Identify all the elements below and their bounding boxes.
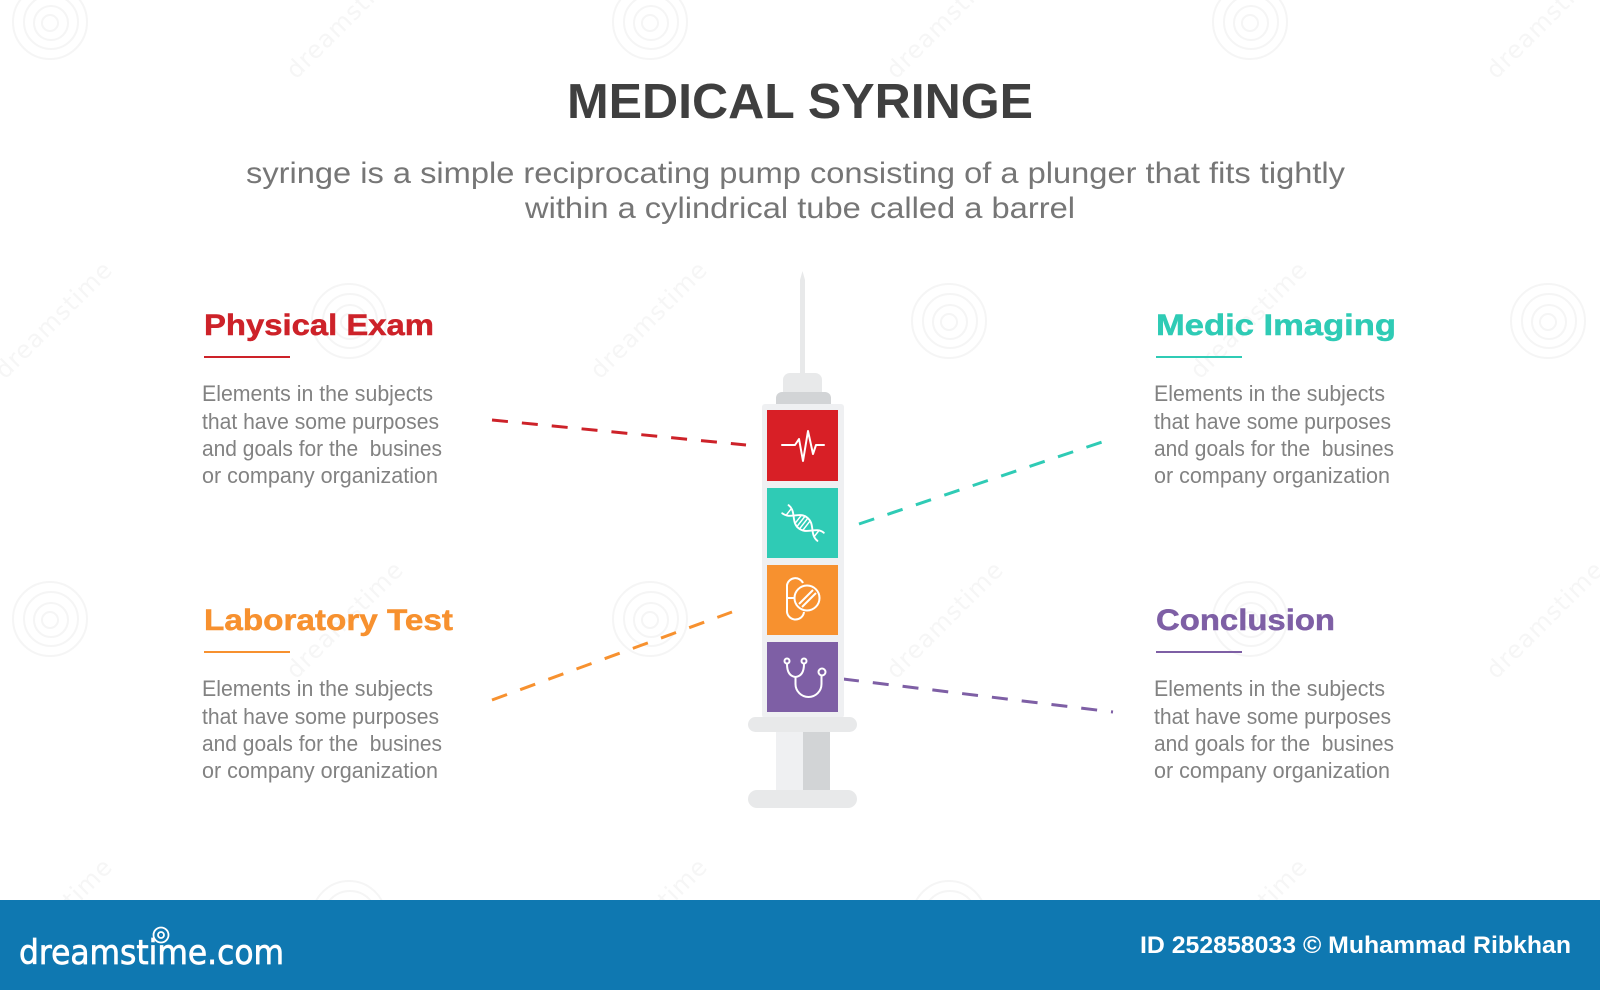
icon: stethoscope bbox=[784, 658, 826, 697]
panel: laboratory test: Elements in the subjects bbox=[202, 676, 433, 701]
watermark pattern: dreamstime bbox=[1184, 255, 1313, 384]
arrow: red dashed connector bbox=[492, 420, 746, 445]
panel: medic imaging: Elements in the subjects bbox=[1154, 381, 1385, 406]
panel: laboratory test: Laboratory Test bbox=[204, 604, 453, 637]
panel: physical exam bbox=[202, 309, 442, 488]
title: MEDICAL SYRINGE bbox=[567, 75, 1033, 129]
watermark pattern: dreamstime bbox=[880, 555, 1009, 684]
segment: teal bbox=[767, 488, 838, 558]
arrow: purple dashed connector bbox=[843, 679, 1113, 712]
panel: conclusion bbox=[1154, 604, 1394, 783]
hub bbox=[783, 373, 822, 392]
panel: conclusion: or company organization bbox=[1154, 758, 1390, 783]
icon: pills bbox=[787, 578, 820, 620]
watermark pattern: dreamstime bbox=[584, 852, 713, 981]
panel: physical exam: or company organization bbox=[202, 463, 438, 488]
footer credit: ID 252858033 © Muhammad Ribkhan bbox=[1140, 932, 1571, 959]
segment: red bbox=[767, 410, 838, 481]
panel: physical exam: and goals for the busines bbox=[202, 436, 442, 461]
panel: laboratory test: and goals for the busines bbox=[202, 731, 442, 756]
subtitle bbox=[246, 157, 1345, 225]
subtitle: within a cylindrical tube called a barrel bbox=[524, 192, 1075, 225]
lower flange bbox=[748, 790, 857, 808]
icon: dna bbox=[781, 504, 825, 542]
panel: medic imaging: that have some purposes bbox=[1154, 409, 1391, 434]
panel: conclusion: and goals for the busines bbox=[1154, 731, 1394, 756]
panel: laboratory test: or company organization bbox=[202, 758, 438, 783]
plunger rod bbox=[776, 732, 830, 791]
footer band bbox=[0, 900, 1600, 990]
syringe bbox=[748, 271, 857, 808]
watermark pattern: dreamstime bbox=[280, 555, 409, 684]
panel: conclusion: that have some purposes bbox=[1154, 704, 1391, 729]
panel: laboratory test bbox=[202, 604, 453, 783]
subtitle: syringe is a simple reciprocating pump consisting of a plunger that fits tightly bbox=[246, 157, 1345, 190]
segment: orange bbox=[767, 565, 838, 635]
panel: medic imaging: or company organization bbox=[1154, 463, 1390, 488]
hub collar bbox=[776, 392, 831, 404]
arrow: orange dashed connector bbox=[492, 612, 732, 700]
panel: physical exam: that have some purposes bbox=[202, 409, 439, 434]
panel: medic imaging: Medic Imaging bbox=[1156, 309, 1396, 342]
icon: heartbeat bbox=[782, 431, 824, 461]
arrow: teal dashed connector bbox=[859, 442, 1102, 524]
panel: physical exam: Physical Exam bbox=[204, 309, 434, 342]
icon: logo spiral bbox=[154, 928, 168, 942]
barrel bbox=[762, 404, 844, 718]
panel: conclusion: Conclusion bbox=[1156, 604, 1335, 637]
panel: conclusion: Elements in the subjects bbox=[1154, 676, 1385, 701]
panel: physical exam: Elements in the subjects bbox=[202, 381, 433, 406]
upper flange bbox=[748, 717, 857, 732]
watermark pattern: dreamstime bbox=[584, 255, 713, 384]
panel: medic imaging bbox=[1154, 309, 1396, 488]
panel: medic imaging: and goals for the busines bbox=[1154, 436, 1394, 461]
panel: laboratory test: that have some purposes bbox=[202, 704, 439, 729]
segment: purple bbox=[767, 642, 838, 712]
footer logo: dreamstime.com: dreamstime.com bbox=[19, 933, 284, 973]
needle bbox=[800, 271, 805, 373]
watermark pattern: dreamstime bbox=[1184, 852, 1313, 981]
